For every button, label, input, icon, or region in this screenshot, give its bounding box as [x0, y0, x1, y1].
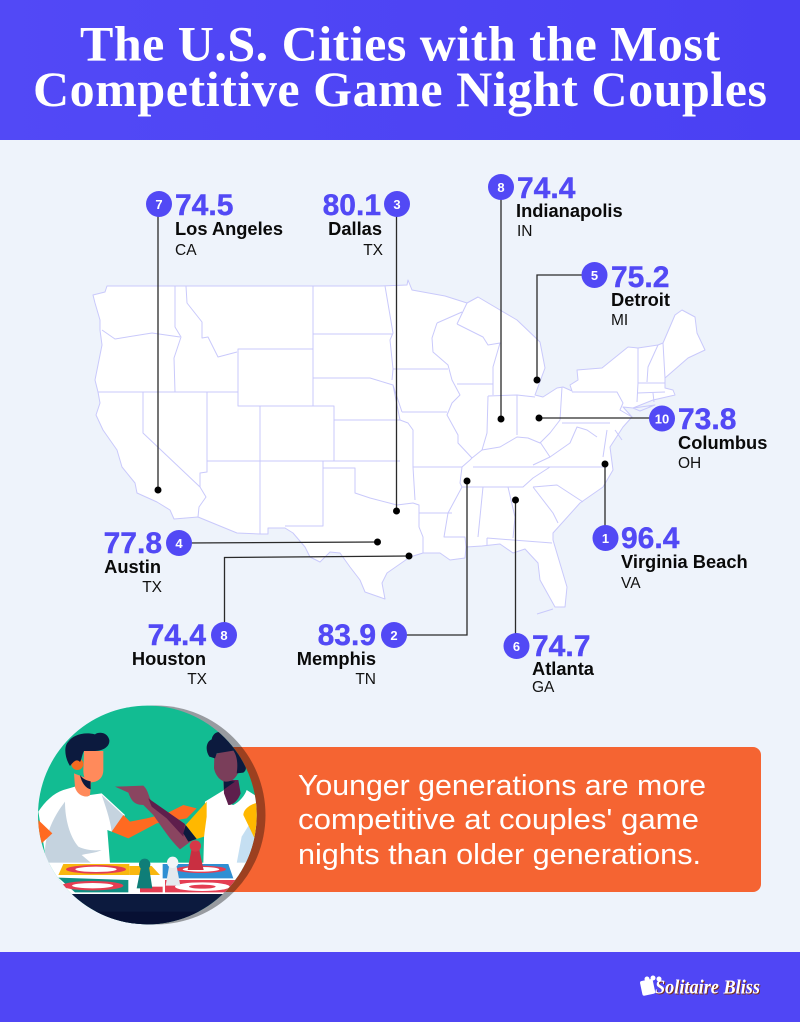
city: Detroit: Detroit	[611, 289, 670, 310]
logo card icon	[640, 976, 662, 996]
city: Atlanta: 74.7	[532, 630, 590, 663]
title	[33, 16, 767, 117]
city: Atlanta: 6	[513, 639, 520, 654]
city: Indianapolis: 8	[497, 180, 505, 195]
table	[72, 894, 223, 924]
city: Los Angeles: Los Angeles	[175, 218, 283, 239]
logo: Solitaire Bliss: Solitaire Bliss	[656, 978, 761, 1000]
city: Detroit: 5	[591, 268, 598, 283]
city: Virginia Beach: 96.4	[621, 522, 680, 555]
city: Columbus	[536, 403, 767, 472]
city: Los Angeles: CA	[175, 242, 197, 259]
city: Los Angeles: 74.5	[175, 189, 233, 222]
city: Austin: TX	[142, 579, 163, 596]
callout text: Younger generations are more	[298, 770, 706, 802]
city: Dallas: 80.1	[323, 189, 381, 222]
city: Dallas: TX	[363, 242, 384, 259]
callout text	[298, 770, 706, 871]
city: Los Angeles	[146, 189, 283, 494]
city: Dallas: Dallas	[328, 218, 382, 239]
city: Dallas	[323, 189, 410, 514]
city: Indianapolis: 74.4	[517, 172, 576, 205]
city: Detroit: 75.2	[611, 261, 669, 294]
city: Columbus: 10	[655, 412, 669, 426]
city: Houston	[132, 552, 412, 688]
city: Columbus: Columbus	[678, 432, 767, 453]
city: Atlanta: Atlanta	[532, 658, 595, 679]
city: Virginia Beach	[592, 460, 748, 592]
city: Indianapolis	[488, 172, 623, 422]
city: Los Angeles: 7	[155, 197, 163, 212]
city: Memphis: TN	[355, 671, 376, 688]
map of the United States	[93, 280, 705, 614]
header banner with title	[0, 0, 800, 140]
illustration: couple playing a board game	[33, 703, 263, 930]
city: Virginia Beach: VA	[621, 575, 641, 592]
city: Virginia Beach: Virginia Beach	[621, 551, 748, 572]
title: Competitive Game Night Couples	[33, 61, 767, 117]
man on the left	[38, 733, 197, 863]
city: Austin: Austin	[104, 556, 161, 577]
circle shadow	[46, 706, 266, 924]
callout text: competitive at couples' game	[298, 804, 699, 836]
city: Atlanta	[504, 496, 595, 696]
city: Memphis: 2	[390, 628, 398, 643]
game pawns	[137, 840, 204, 888]
city: Atlanta: GA	[532, 679, 555, 696]
game board	[49, 862, 246, 894]
city: Virginia Beach: 1	[602, 531, 609, 546]
city: Austin: 4	[175, 536, 183, 551]
callout text: nights than older generations.	[298, 839, 701, 871]
city: Detroit: MI	[611, 312, 628, 329]
city: Houston: TX	[187, 671, 208, 688]
city: Indianapolis: Indianapolis	[516, 200, 623, 221]
city: Detroit	[534, 261, 670, 384]
city: Columbus: OH	[678, 455, 701, 472]
man on the right	[115, 732, 257, 863]
city: Memphis: Memphis	[297, 648, 376, 669]
callout panel	[200, 747, 761, 892]
city: Houston: 8	[220, 628, 228, 643]
city: Memphis: 83.9	[318, 619, 376, 652]
city: Houston: 74.4	[148, 619, 206, 652]
city: Dallas: 3	[393, 197, 401, 212]
city: Houston: Houston	[132, 648, 206, 669]
city: Indianapolis: IN	[517, 223, 532, 240]
city: Austin	[104, 527, 381, 596]
city: Austin: 77.8	[104, 527, 162, 560]
city: Columbus: 73.8	[678, 403, 736, 436]
footer band	[0, 952, 800, 1022]
logo: Solitaire Bliss: Solitaire Bliss	[655, 976, 760, 998]
city: Memphis	[297, 478, 470, 688]
title: The U.S. Cities with the Most	[80, 16, 720, 72]
